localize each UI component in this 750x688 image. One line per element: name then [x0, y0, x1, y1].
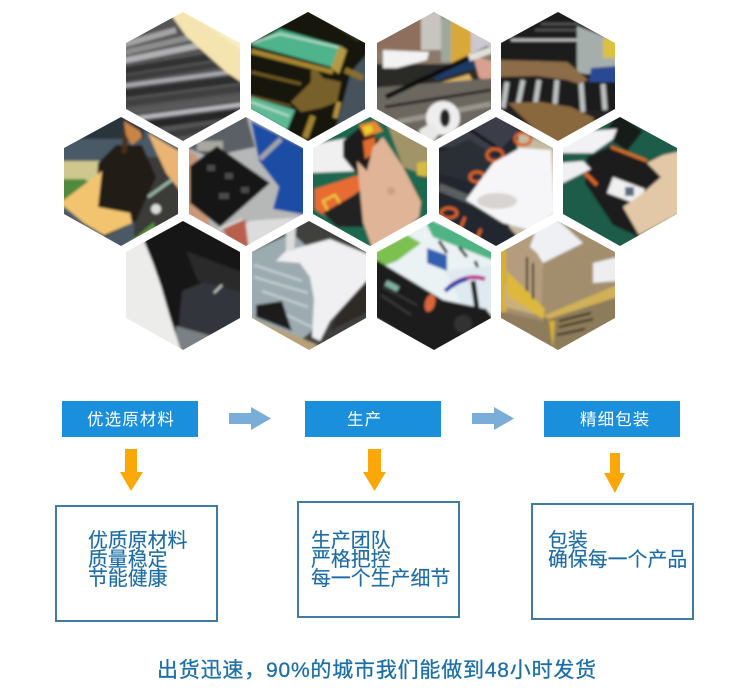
- footer delivery statement: 出货迅速，90%的城市我们能做到48小时发货: [157, 659, 597, 682]
- production text: 严格把控: [311, 549, 391, 571]
- photo: toner rollers: [126, 12, 240, 141]
- step three header: 精细包装: [580, 411, 650, 429]
- hexagon photo mosaic: [64, 12, 677, 350]
- step two header: 生产: [347, 411, 382, 429]
- step one header: [62, 401, 198, 437]
- photo: labelling with gloves: [563, 117, 677, 246]
- photo: gloved hand on carton: [501, 221, 615, 350]
- panel: raw materials: [55, 505, 218, 622]
- photo: fitting drum blade: [377, 12, 491, 141]
- photo: cartridges on assembly line: [501, 12, 615, 141]
- production text: 生产团队: [311, 530, 391, 552]
- panel: packaging: [531, 503, 694, 620]
- photo: green drum units: [251, 12, 365, 141]
- photo: holding orange clip cartridge: [313, 117, 427, 246]
- photo: screwing cartridge: [189, 117, 303, 246]
- raw materials text: 节能健康: [88, 568, 168, 590]
- photo: white glove on cartridges: [439, 117, 553, 246]
- packaging text: 确保每一个产品: [548, 549, 687, 571]
- production text: [311, 530, 450, 590]
- packaging text: [548, 530, 687, 571]
- step three header: [544, 401, 680, 437]
- raw materials text: 优质原材料: [88, 530, 187, 552]
- raw materials text: [88, 530, 187, 590]
- photo: toner cartridge with box: [377, 221, 491, 350]
- photo: gloved hand with wrapped cartridge: [252, 221, 366, 350]
- raw materials text: 质量稳定: [88, 549, 168, 571]
- panel: production: [297, 501, 460, 618]
- packaging text: 包装: [548, 530, 588, 552]
- production text: 每一个生产细节: [311, 568, 450, 590]
- step one header: 优选原材料: [87, 411, 175, 429]
- photo: hand holding cartridge part: [64, 117, 178, 246]
- step two header: [305, 401, 441, 437]
- photo: black packing bag: [126, 221, 240, 350]
